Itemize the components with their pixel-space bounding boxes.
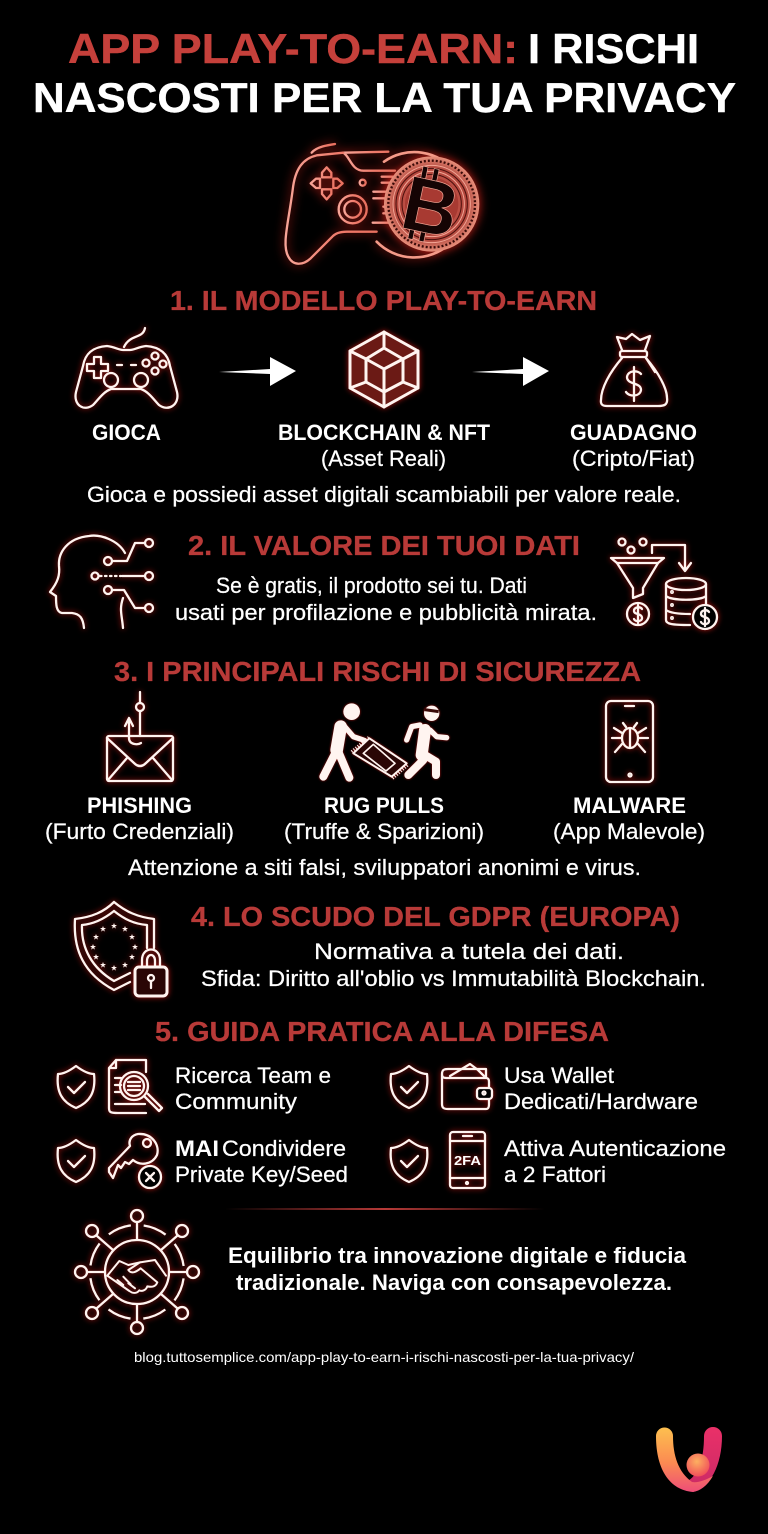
title: NASCOSTI PER LA TUA PRIVACY: [33, 74, 736, 121]
icon: 2FA phone: [450, 1132, 485, 1188]
item: two-factor: [391, 1132, 726, 1188]
text: research team: [175, 1063, 331, 1114]
title: [33, 25, 736, 121]
text: wallet: Dedicati/Hardware: [504, 1089, 698, 1114]
text: research team: Community: [175, 1089, 297, 1114]
item: wallet: [391, 1063, 698, 1114]
label: guadagno: [570, 420, 697, 471]
heading 4: 4. LO SCUDO DEL GDPR (EUROPA): [191, 901, 680, 932]
closing text: tradizionale. Naviga con consapevolezza.: [236, 1270, 672, 1295]
text: two-factor: [504, 1136, 726, 1187]
section 2: value of data: [50, 530, 717, 629]
arrow 2: [472, 357, 549, 386]
icon: document magnifier: [109, 1060, 162, 1113]
heading 3: 3. I PRINCIPALI RISCHI DI SICUREZZA: [114, 656, 641, 687]
label: phishing: [45, 793, 234, 844]
label: gioca: GIOCA: [92, 420, 161, 445]
section 1: play-to-earn model: [75, 285, 697, 507]
label: blockchain: [278, 420, 491, 471]
label: malware: (App Malevole): [553, 819, 705, 844]
description 2: Se è gratis, il prodotto sei tu. Dati: [216, 573, 527, 598]
description 2: [175, 573, 597, 625]
icon: key with cross: [109, 1134, 161, 1188]
label: rug pulls: RUG PULLS: [324, 793, 444, 818]
label: rug pulls: [284, 793, 484, 844]
description 4: Normativa a tutela dei dati.: [314, 939, 624, 964]
heading 1: 1. IL MODELLO PLAY-TO-EARN: [170, 285, 597, 316]
arrow 1: [219, 357, 296, 386]
description 3: Attenzione a siti falsi, sviluppatori anonimi e virus.: [128, 855, 641, 880]
closing text: [228, 1243, 687, 1295]
text: private key: [175, 1136, 348, 1187]
label: blockchain: BLOCKCHAIN & NFT: [278, 420, 491, 445]
section 3: security risks: [45, 656, 705, 880]
icon: shield check: [391, 1140, 427, 1182]
label: rug pulls: (Truffe & Sparizioni): [284, 819, 484, 844]
icon: handshake network: [75, 1210, 199, 1334]
text: two-factor: a 2 Fattori: [504, 1162, 606, 1187]
item: research team: [58, 1060, 331, 1114]
description 4: Sfida: Diritto all'oblio vs Immutabilità Blockchain.: [201, 966, 706, 991]
description 4: [201, 939, 706, 991]
label: blockchain: (Asset Reali): [321, 446, 446, 471]
text: research team: Ricerca Team e: [175, 1063, 331, 1088]
closing text: Equilibrio tra innovazione digitale e fiducia: [228, 1243, 687, 1268]
icon: rug pull figures: [323, 703, 447, 778]
icon: controller and bitcoin: B: [394, 160, 466, 255]
title: I RISCHI: [528, 25, 699, 72]
text: wallet: Usa Wallet: [504, 1063, 614, 1088]
icon: head with circuits: [50, 536, 153, 628]
description 2: usati per profilazione e pubblicità mirata.: [175, 600, 597, 625]
label: phishing: (Furto Credenziali): [45, 819, 234, 844]
source url: blog.tuttosemplice.com/app-play-to-earn-i-rischi-nascosti-per-la-tua-privacy/: [134, 1349, 634, 1365]
icon: 2FA phone: 2FA: [454, 1153, 482, 1168]
icon: gamepad: [75, 328, 177, 408]
icon: wallet: [442, 1064, 492, 1109]
icon: data funnel: [611, 538, 717, 629]
section 5: practical guide: [58, 1016, 726, 1188]
icon: EU shield with padlock: [75, 902, 167, 996]
icon: shield check: [58, 1140, 94, 1182]
description 1: Gioca e possiedi asset digitali scambiabili per valore reale.: [87, 482, 681, 507]
text: wallet: [504, 1063, 698, 1114]
text: private key: Condividere: [222, 1136, 346, 1161]
icon: money bag: [601, 334, 667, 406]
label: guadagno: (Cripto/Fiat): [572, 446, 695, 471]
logo: [656, 1427, 722, 1492]
heading 5: 5. GUIDA PRATICA ALLA DIFESA: [155, 1016, 609, 1047]
icon: phone with malware bug: [606, 701, 653, 782]
icon: blockchain cube: [350, 332, 418, 407]
text: two-factor: Attiva Autenticazione: [504, 1136, 726, 1161]
label: guadagno: GUADAGNO: [570, 420, 697, 445]
text: private key: Private Key/Seed: [175, 1162, 348, 1187]
icon: shield check: [391, 1066, 427, 1108]
icon: shield check: [58, 1066, 94, 1108]
conclusion: [75, 1210, 687, 1334]
label: malware: [553, 793, 705, 844]
section 4: GDPR: [75, 901, 706, 996]
heading 2: 2. IL VALORE DEI TUOI DATI: [188, 530, 580, 561]
icon: phishing envelope: [107, 692, 173, 781]
label: phishing: PHISHING: [87, 793, 192, 818]
item: private key: [58, 1134, 348, 1188]
label: malware: MALWARE: [573, 793, 686, 818]
icon: controller and bitcoin: [286, 144, 479, 264]
title: APP PLAY-TO-EARN:: [68, 25, 518, 72]
text: private key: MAI: [175, 1136, 219, 1161]
